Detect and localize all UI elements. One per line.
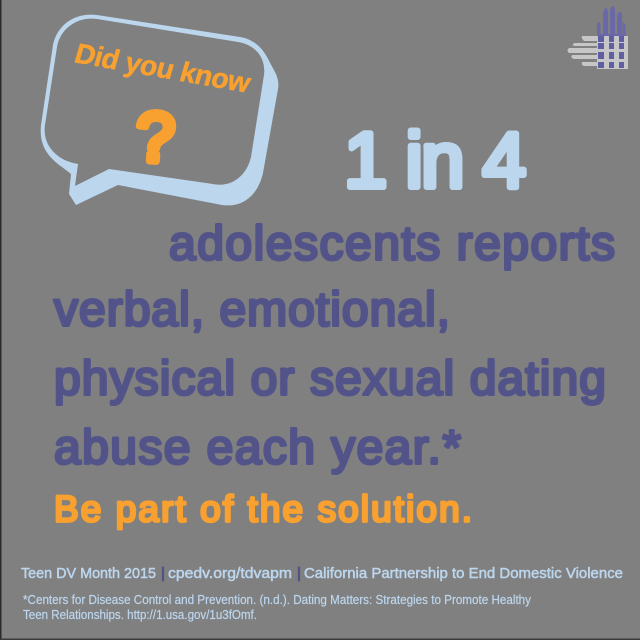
citation: *Centers for Disease Control and Prevention. (n.d.). Dating Matters: Strategies to Promote Healthy (23, 593, 532, 607)
citation: Teen Relationships. http://1.usa.gov/1u3fOmf. (23, 608, 257, 622)
icon: speech bubble (41, 15, 278, 205)
headline stat: 1 in 4: 1 in 4 (344, 116, 526, 204)
footer line: California Partnership to End Domestic Violence (304, 565, 623, 582)
main text line 3: physical or sexual dating (54, 352, 606, 406)
footer line (21, 565, 623, 582)
footer line: | (161, 565, 165, 582)
icon: question mark: ? (134, 98, 176, 177)
footer line: cpedv.org/tdvapm (168, 565, 292, 582)
footer line: | (297, 565, 301, 582)
logo: woven hands (568, 6, 628, 69)
citation (23, 593, 532, 622)
bubble text: did you know: Did you know (71, 38, 254, 99)
call to action: Be part of the solution. (54, 488, 472, 530)
main text line 4: abuse each year.* (54, 422, 461, 474)
main text line 2: verbal, emotional, (54, 284, 450, 336)
main text line 1: adolescents reports (169, 218, 615, 270)
footer line: Teen DV Month 2015 (21, 565, 156, 582)
